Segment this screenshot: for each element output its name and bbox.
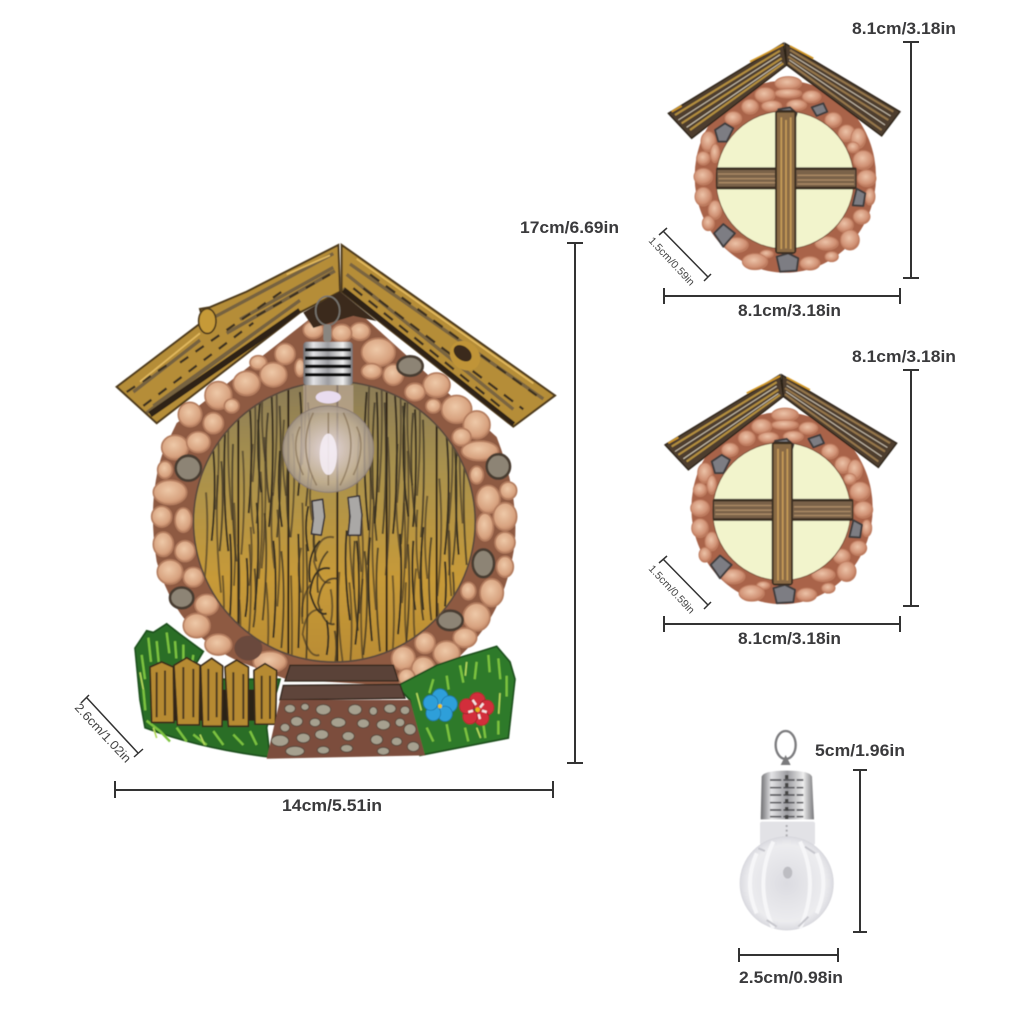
hanging light bulb (283, 296, 374, 492)
window one dimensions: 8.1cm/3.18in (852, 20, 956, 38)
door illustration (117, 245, 555, 759)
window one (668, 43, 900, 273)
cobble path (267, 700, 425, 759)
bulb dimensions (739, 742, 905, 987)
stone ring (152, 295, 517, 686)
roof (117, 245, 555, 427)
window one dimensions: 1.5cm/0.59in (646, 235, 697, 289)
window one dimensions: 8.1cm/3.18in (738, 302, 841, 320)
door handles (311, 496, 362, 535)
dimension: door width (115, 781, 553, 815)
window two (665, 375, 897, 604)
bulb dimensions: 2.5cm/0.98in (739, 969, 843, 987)
window two dimensions: 8.1cm/3.18in (738, 630, 841, 648)
dimension: door depth: 2.6cm/1.02in (72, 700, 134, 766)
light bulb (740, 731, 833, 930)
bulb dimensions: 5cm/1.96in (815, 742, 905, 760)
dimension: door height: 17cm/6.69in (520, 219, 619, 237)
window two dimensions: 8.1cm/3.18in (852, 348, 956, 366)
garden fence (150, 658, 277, 726)
window two dimensions (646, 348, 956, 648)
round wooden door (192, 382, 476, 664)
window one dimensions (646, 20, 956, 320)
window two dimensions: 1.5cm/0.59in (646, 563, 697, 617)
door steps (280, 665, 405, 700)
dimension: door width: 14cm/5.51in (282, 797, 382, 815)
dimension: door height (520, 219, 619, 763)
grass and base (135, 624, 515, 757)
flowers (423, 689, 494, 726)
